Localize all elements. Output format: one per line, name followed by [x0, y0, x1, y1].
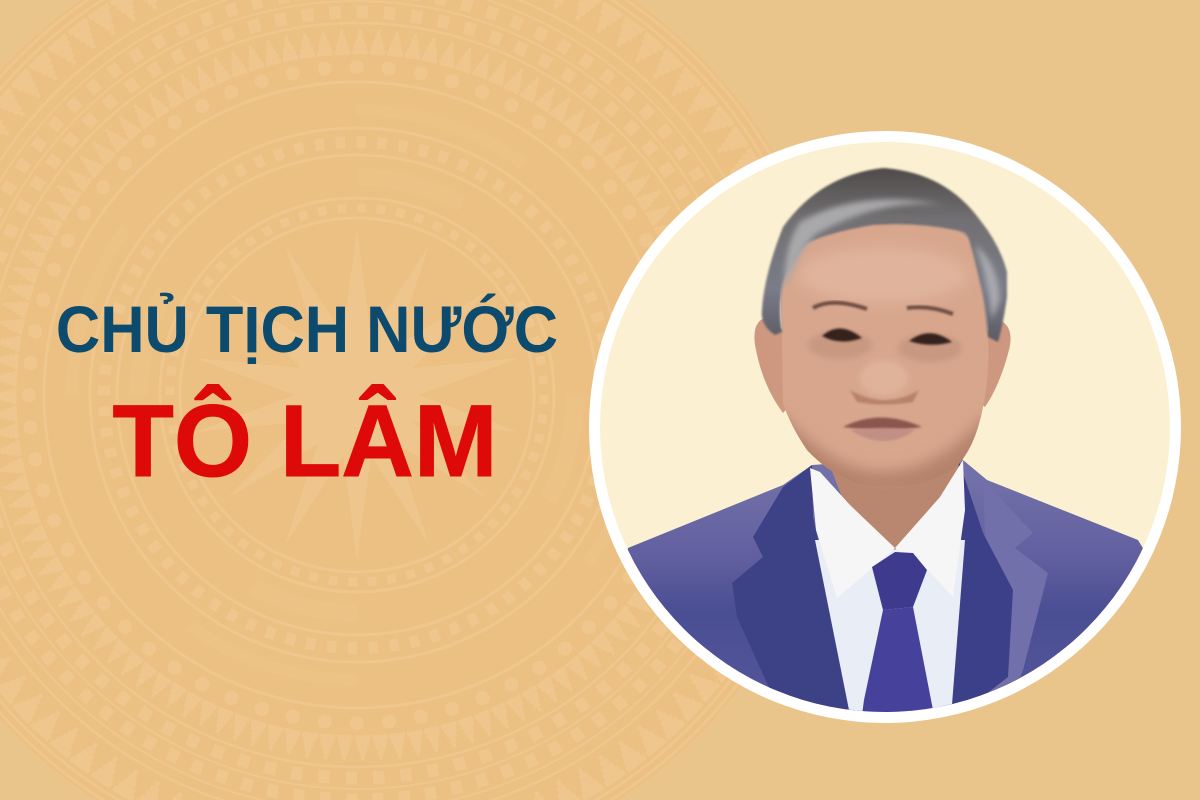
title: Tô Lâm: TÔ LÂM — [112, 384, 498, 498]
portrait in circular frame — [589, 131, 1181, 723]
nose — [850, 390, 919, 404]
brows — [813, 303, 867, 309]
collar left — [810, 468, 895, 598]
left lapel — [732, 465, 856, 710]
eyes — [822, 328, 862, 342]
collar right — [895, 460, 965, 597]
right lapel — [984, 517, 1048, 694]
ears — [754, 318, 786, 413]
hair — [762, 168, 1007, 342]
neck — [832, 464, 959, 550]
face — [781, 223, 988, 474]
suit — [628, 460, 1143, 712]
mouth — [843, 418, 922, 430]
tie — [862, 552, 933, 712]
title: Chủ tịch nước: CHỦ TỊCH NƯỚC — [56, 292, 558, 366]
shirt — [815, 540, 965, 730]
